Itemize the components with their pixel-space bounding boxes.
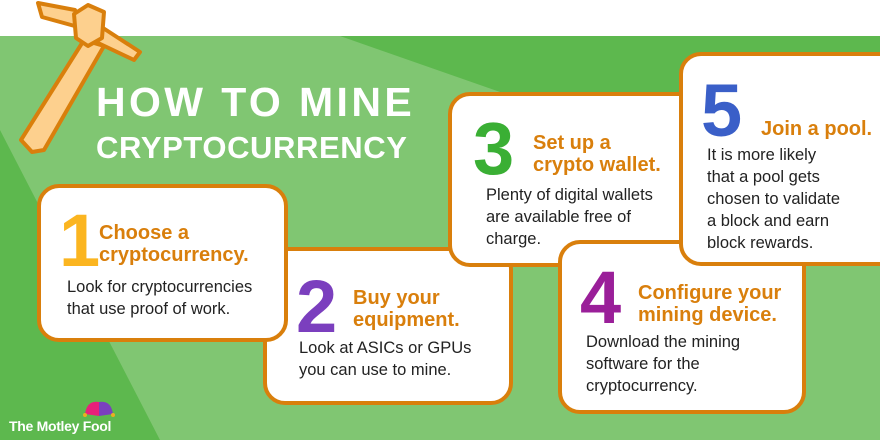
panel: step 4 — [558, 240, 806, 414]
body 5: block rewards. — [707, 234, 813, 252]
heading 1 — [99, 222, 249, 266]
panel: step 5 — [679, 52, 880, 266]
logo: The Motley Fool — [9, 402, 115, 434]
heading 1: Choose a — [99, 222, 189, 244]
icon: pickaxe — [19, 1, 142, 154]
body 5 — [707, 146, 840, 252]
body 2: you can use to mine. — [299, 361, 451, 379]
body 2: Look at ASICs or GPUs — [299, 339, 471, 357]
panel: step 2 — [263, 247, 513, 405]
number 4: 4 — [580, 256, 621, 339]
body 4 — [586, 333, 740, 395]
body 5: chosen to validate — [707, 190, 840, 208]
body 5: It is more likely — [707, 146, 816, 164]
title: HOW TO MINE — [96, 79, 415, 125]
body 4: software for the — [586, 355, 700, 373]
heading 2 — [353, 287, 460, 331]
heading 5: Join a pool. — [761, 118, 872, 140]
panel: step 1 — [37, 184, 288, 342]
body 5: a block and earn — [707, 212, 829, 230]
number 5: 5 — [701, 69, 742, 152]
icon: jester hat — [83, 402, 115, 417]
heading 2: Buy your — [353, 287, 440, 309]
body 3: Plenty of digital wallets — [486, 186, 653, 204]
body 5: that a pool gets — [707, 168, 820, 186]
panel: step 3 — [448, 92, 708, 267]
body 3: are available free of — [486, 208, 631, 226]
heading 3 — [533, 132, 661, 176]
body 1: Look for cryptocurrencies — [67, 278, 252, 296]
heading 3: crypto wallet. — [533, 154, 661, 176]
heading 3: Set up a — [533, 132, 611, 154]
body 4: cryptocurrency. — [586, 377, 698, 395]
heading 2: equipment. — [353, 309, 460, 331]
body 2 — [299, 339, 471, 379]
heading 4: Configure your — [638, 282, 781, 304]
body 1 — [67, 278, 252, 318]
heading 1: cryptocurrency. — [99, 244, 249, 266]
logo: The Motley Fool: The Motley Fool — [9, 418, 111, 434]
body 3: charge. — [486, 230, 541, 248]
number 1: 1 — [59, 199, 100, 282]
body 1: that use proof of work. — [67, 300, 230, 318]
body 4: Download the mining — [586, 333, 740, 351]
heading 4: mining device. — [638, 304, 777, 326]
number 2: 2 — [296, 265, 337, 348]
title — [96, 79, 415, 165]
heading 4 — [638, 282, 781, 326]
body 3 — [486, 186, 653, 248]
title: CRYPTOCURRENCY — [96, 130, 408, 165]
number 3: 3 — [473, 107, 514, 190]
